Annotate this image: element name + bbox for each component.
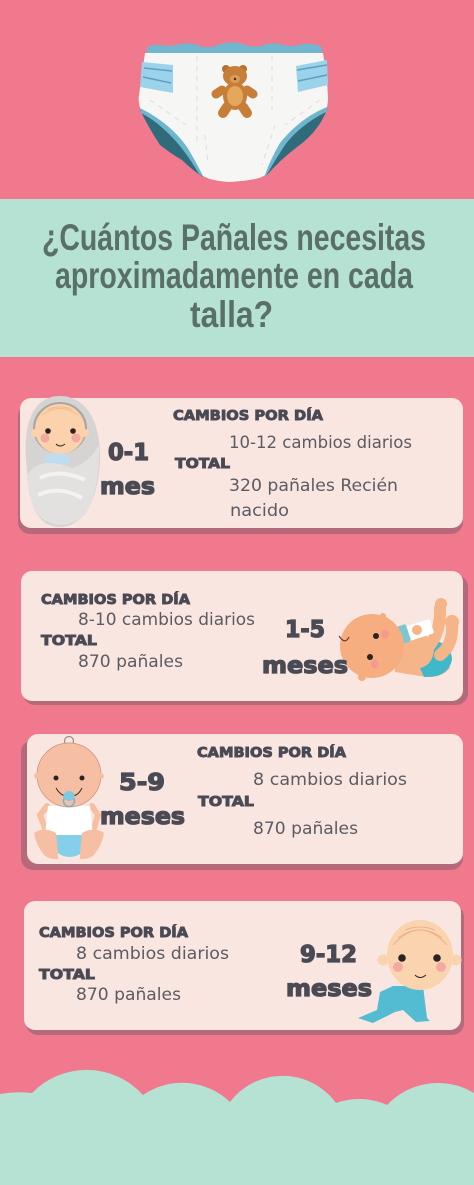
text block: changes: TOTAL: [175, 456, 230, 472]
panel: 0-1 mes: [18, 396, 463, 534]
age label: [286, 942, 372, 1002]
text block: changes: CAMBIOS POR DÍA: [173, 407, 324, 424]
panel: 5-9 meses: [21, 734, 463, 870]
icon: baby with bottle: [339, 598, 459, 681]
icon: baby with pacifier: [34, 736, 104, 859]
age label: meses: [286, 976, 372, 1002]
age label: meses: [100, 804, 185, 830]
age label: 1-5: [285, 617, 325, 643]
title: talla?: [190, 294, 273, 335]
age label: 0-1: [108, 440, 149, 466]
text block: changes: 8 cambios diarios: [253, 770, 407, 790]
age label: [100, 770, 185, 830]
text block: changes: 8 cambios diarios: [76, 944, 229, 964]
age label: mes: [100, 474, 155, 500]
text block: changes: 870 pañales: [76, 985, 181, 1005]
icon: swaddled newborn: [26, 396, 100, 527]
text block: changes: TOTAL: [41, 633, 97, 649]
text block: changes: nacido: [230, 501, 289, 521]
age label: 9-12: [300, 942, 357, 968]
icon: crawling baby: [358, 920, 462, 1023]
age label: 5-9: [119, 770, 165, 796]
age label: [262, 617, 348, 679]
text block: changes: TOTAL: [198, 794, 254, 810]
age label: [100, 440, 155, 500]
text block: changes: [173, 407, 412, 521]
text block: changes: CAMBIOS POR DÍA: [39, 924, 189, 941]
text block: changes: 870 pañales: [78, 652, 183, 672]
text block: changes: 10-12 cambios diarios: [229, 433, 412, 453]
text block: changes: 8-10 cambios diarios: [78, 610, 255, 630]
text block: changes: [197, 744, 407, 839]
text block: changes: [39, 924, 229, 1005]
text block: changes: 320 pañales Recién: [229, 476, 398, 496]
title band: [0, 199, 474, 357]
text block: changes: TOTAL: [39, 967, 95, 983]
panel: 9-12 meses: [24, 901, 464, 1035]
panel: 1-5 meses: [21, 571, 468, 705]
icon: diaper with teddy bear: [139, 42, 328, 182]
age label: meses: [262, 653, 348, 679]
cloud footer: [0, 1070, 474, 1185]
icon: teddy bear: [216, 65, 253, 113]
text block: changes: CAMBIOS POR DÍA: [41, 591, 191, 608]
text block: changes: [41, 591, 255, 672]
title: [42, 217, 426, 335]
text block: changes: 870 pañales: [253, 819, 358, 839]
text block: changes: CAMBIOS POR DÍA: [197, 744, 347, 761]
